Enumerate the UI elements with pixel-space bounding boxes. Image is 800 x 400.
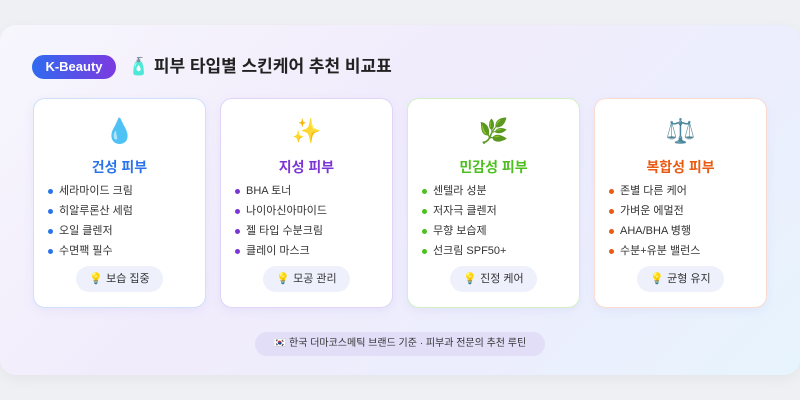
list: 나이아신아마이드 [246, 205, 327, 217]
footer note: 🇰🇷 한국 더마코스메틱 브랜드 기준 · 피부과 전문의 추천 루틴 [274, 338, 526, 349]
list [609, 184, 700, 257]
badge: K-Beauty: K-Beauty [45, 59, 103, 74]
list [422, 184, 506, 257]
list: 저자극 클렌저 [433, 205, 497, 217]
list [235, 184, 327, 257]
heading: 지성 피부 [279, 159, 334, 175]
badge: K-Beauty [32, 55, 116, 79]
tag [76, 266, 163, 292]
icon: sparkles: ✨ [292, 118, 321, 145]
panel: oily skin [220, 98, 393, 308]
heading: 건성 피부 [92, 159, 147, 175]
panel: sensitive skin [407, 98, 580, 308]
list: 센텔라 성분 [433, 185, 487, 197]
list: 가벼운 에멀전 [620, 205, 684, 217]
list: 세라마이드 크림 [59, 185, 133, 197]
tag: 💡 보습 집중 [89, 273, 150, 285]
heading: 복합성 피부 [646, 159, 715, 175]
tag: 💡 균형 유지 [650, 273, 711, 285]
list: BHA 토너 [246, 185, 291, 197]
list: 젤 타입 수분크림 [246, 225, 323, 237]
list: 오일 클렌저 [59, 225, 113, 237]
icon: herb: 🌿 [479, 118, 508, 145]
list: 수분+유분 밸런스 [620, 245, 700, 257]
list: 존별 다른 케어 [620, 185, 687, 197]
panel: dry skin [33, 98, 206, 308]
heading: 민감성 피부 [459, 159, 528, 175]
icon: scales: ⚖️ [666, 118, 695, 145]
list: AHA/BHA 병행 [620, 225, 691, 237]
tag [450, 266, 537, 292]
tag [263, 266, 350, 292]
tag: 💡 모공 관리 [276, 273, 337, 285]
title: 🧴 피부 타입별 스킨케어 추천 비교표 [128, 57, 392, 76]
icon: water drop: 💧 [105, 118, 134, 145]
list: 선크림 SPF50+ [433, 245, 506, 257]
list: 무향 보습제 [433, 225, 487, 237]
list: 클레이 마스크 [246, 245, 310, 257]
panel: combination skin [594, 98, 767, 308]
list [48, 184, 133, 257]
list: 히알루론산 세럼 [59, 205, 133, 217]
tag [637, 266, 724, 292]
list: 수면팩 필수 [59, 245, 113, 257]
tag: 💡 진정 케어 [463, 273, 524, 285]
footer note [255, 332, 545, 356]
